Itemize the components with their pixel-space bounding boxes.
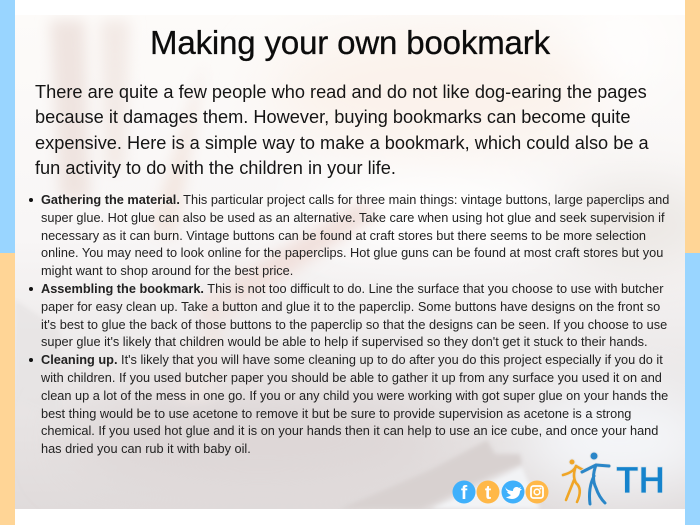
item: assembling the bookmark: super glue it's likely that children would be able to help if supervised so they don't get it stuck to their hands. (41, 334, 648, 349)
social icons (452, 480, 548, 504)
logo text: TH: TH (616, 460, 665, 502)
intro paragraph: There are quite a few people who read and do not like dog-earing the pages (35, 82, 647, 102)
item: gathering the material: Gathering the material. This particular project calls for three main things: vintage buttons, large paperclips and (41, 192, 669, 207)
intro paragraph (35, 82, 649, 178)
icon: tumblr: t (485, 483, 492, 504)
item: cleaning up: clean up a lot of the mess in one go. If you or any child you were working with got super glue on your hands the (41, 388, 668, 403)
logo figure: blue (582, 465, 609, 504)
item: cleaning up: best thing would be to use acetone to remove it but be sure to provide supervision as acetone is a strong (41, 406, 631, 421)
intro paragraph: because it damages them. However, buying bookmarks can become quite (35, 107, 630, 127)
side strip: right blue (685, 253, 700, 525)
item: gathering the material: super glue. Hot glue can also be used as an alternative. Take care when using hot glue and seek supervision if (41, 210, 664, 225)
item: assembling the bookmark: it's best to glue the back of those buttons to the paperclip so that the designs can be seen. If you choose to use (41, 317, 667, 332)
item: assembling the bookmark (0, 280, 669, 351)
item: gathering the material: might want to shop around for the best price. (41, 263, 293, 278)
title: Making your own bookmark (150, 24, 550, 61)
intro paragraph: expensive. Here is a simple way to make a bookmark, which could also be a (35, 133, 649, 153)
icon: twitter (502, 480, 524, 504)
icon: facebook: f (461, 483, 468, 504)
item: assembling the bookmark: paper for easy clean up. Take a button and glue it to the paperclip. Some buttons have designs on the front so (41, 299, 660, 314)
side strip: left orange (0, 253, 15, 525)
bulleted instructions (29, 192, 669, 499)
logo: TH dancers (562, 452, 665, 506)
side strip: right orange (685, 0, 700, 253)
item: cleaning up: has dried you can rub it with baby oil. (41, 441, 251, 456)
logo figure: orange (563, 466, 583, 502)
item: cleaning up: with children. If you used butcher paper you should be able to gather it up from any surface you used it on and (41, 370, 662, 385)
item: gathering the material: online. You may need to look online for the paperclips. Hot glue guns can be found at most craft stores but you (41, 245, 663, 260)
item: cleaning up (0, 351, 669, 458)
item: assembling the bookmark: Assembling the bookmark. This is not too difficult to do. Line the surface that you choose to use with butcher (41, 281, 663, 296)
item: gathering the material (0, 191, 669, 280)
item: cleaning up: Cleaning up. It's likely that you will have some cleaning up to do after you do this project especially if you do it (41, 352, 663, 367)
intro paragraph: fun activity to do with the children in your life. (35, 158, 396, 178)
side strip: left blue (0, 0, 15, 253)
icon: instagram (526, 480, 548, 504)
item: gathering the material: necessary as it can burn. Vintage buttons can be found at craft stores but there seems to be more selection (41, 228, 646, 243)
logo head: orange (569, 459, 575, 465)
logo head: blue (590, 452, 598, 460)
item: cleaning up: chemical. If you used hot glue and it is on your hands then it can help to use an ice cube, and once your hand (41, 423, 658, 438)
